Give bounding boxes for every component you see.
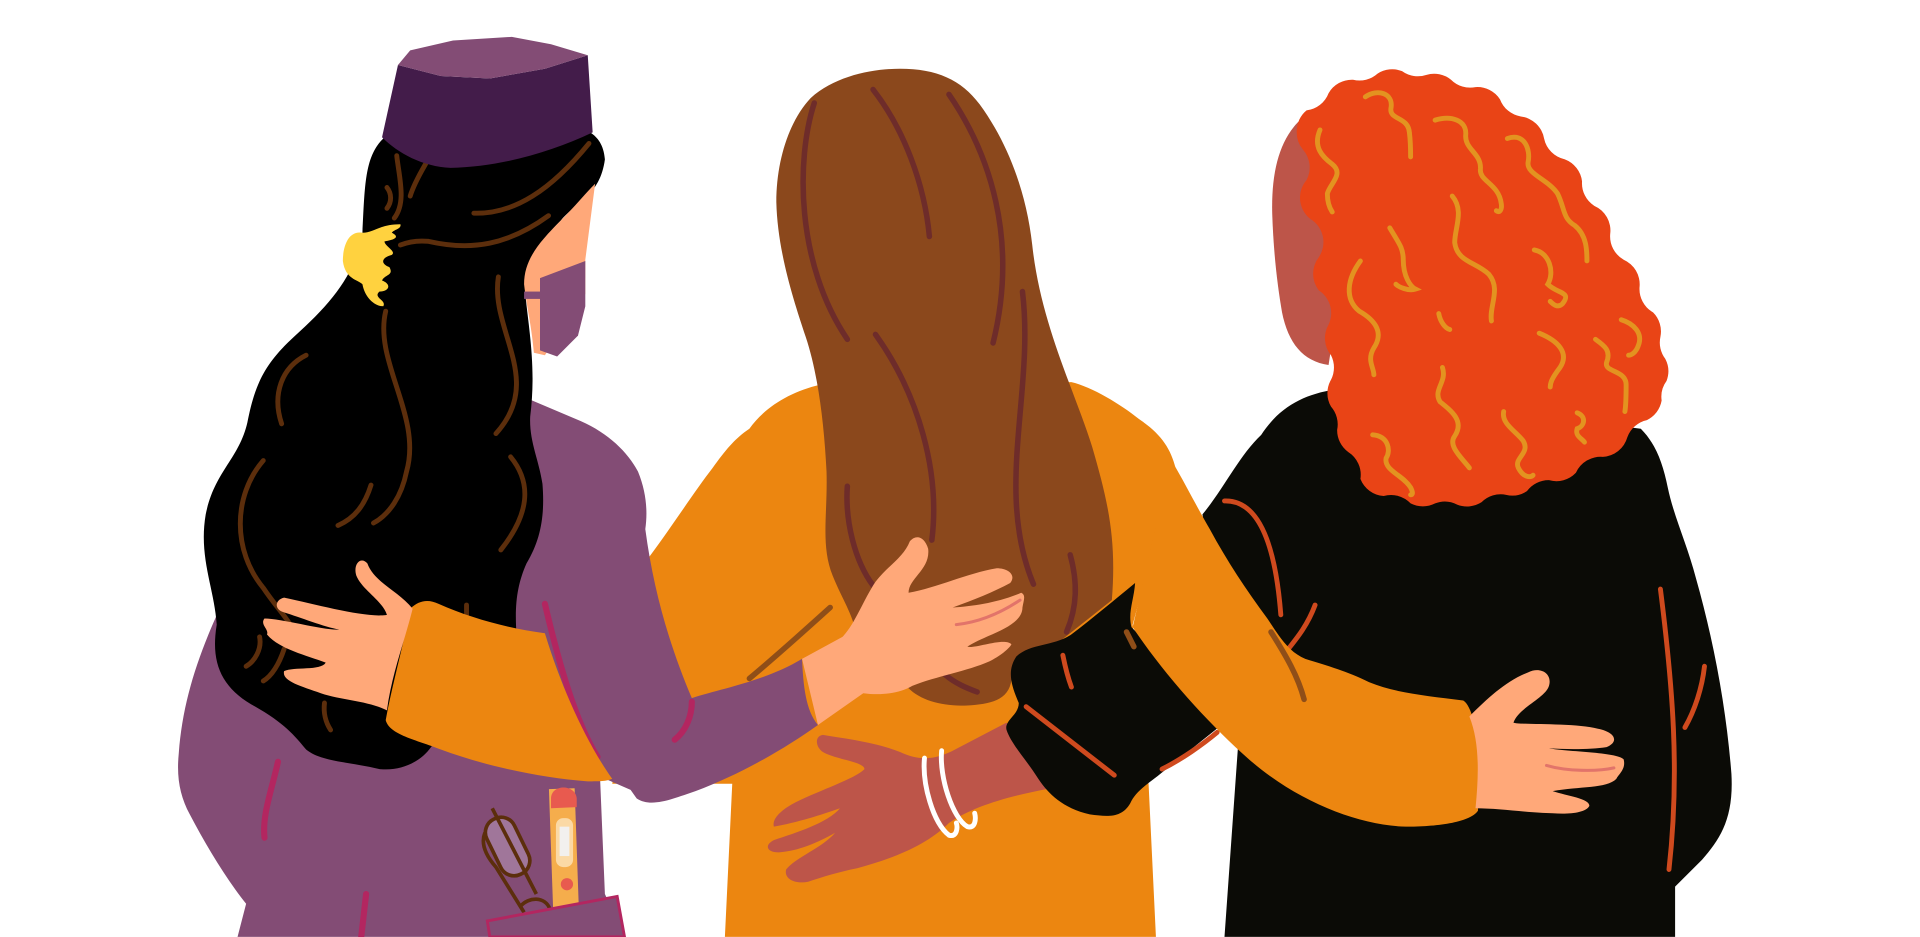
bandage tube in pocket bbox=[549, 787, 579, 909]
glasses in pocket bbox=[480, 808, 550, 912]
woman on the right: black dress, red curly hair bbox=[1202, 69, 1732, 937]
long black hair bbox=[204, 132, 605, 769]
hair curls bbox=[1317, 93, 1640, 495]
peach hand on left woman's back bbox=[263, 560, 413, 710]
red curly hair bbox=[1297, 69, 1668, 506]
face mask bbox=[524, 261, 585, 356]
black dress body bbox=[1202, 390, 1732, 937]
woman in the middle: orange dress bbox=[612, 69, 1624, 937]
dress fold lines bbox=[1224, 501, 1704, 870]
peach hand on right woman's back bbox=[1469, 670, 1624, 814]
hat bbox=[382, 37, 593, 168]
brown hand with bangles bbox=[768, 723, 1048, 882]
hair strand lines bbox=[803, 90, 1075, 692]
uniform fold lines bbox=[264, 604, 692, 937]
yellow hair clip bbox=[343, 224, 401, 306]
woman on the left: purple uniform, black hair, hat, mask bbox=[178, 37, 818, 937]
pocket bbox=[487, 896, 624, 937]
black sleeve of the right woman bbox=[1006, 583, 1224, 816]
long brown hair bbox=[776, 69, 1113, 706]
sleeve fold lines bbox=[1026, 655, 1217, 775]
white bangles bbox=[924, 751, 975, 836]
peach hand on middle woman's back bbox=[802, 537, 1024, 725]
face bbox=[524, 184, 595, 355]
orange sleeve reaching to the right bbox=[1127, 463, 1479, 827]
hair strand lines bbox=[240, 143, 589, 730]
orange sleeve reaching to the left bbox=[386, 601, 612, 781]
tinted under-hair bbox=[1272, 118, 1347, 365]
orange dress body bbox=[612, 382, 1176, 937]
dress seam lines bbox=[749, 607, 830, 678]
purple uniform with reaching arm bbox=[178, 398, 818, 937]
